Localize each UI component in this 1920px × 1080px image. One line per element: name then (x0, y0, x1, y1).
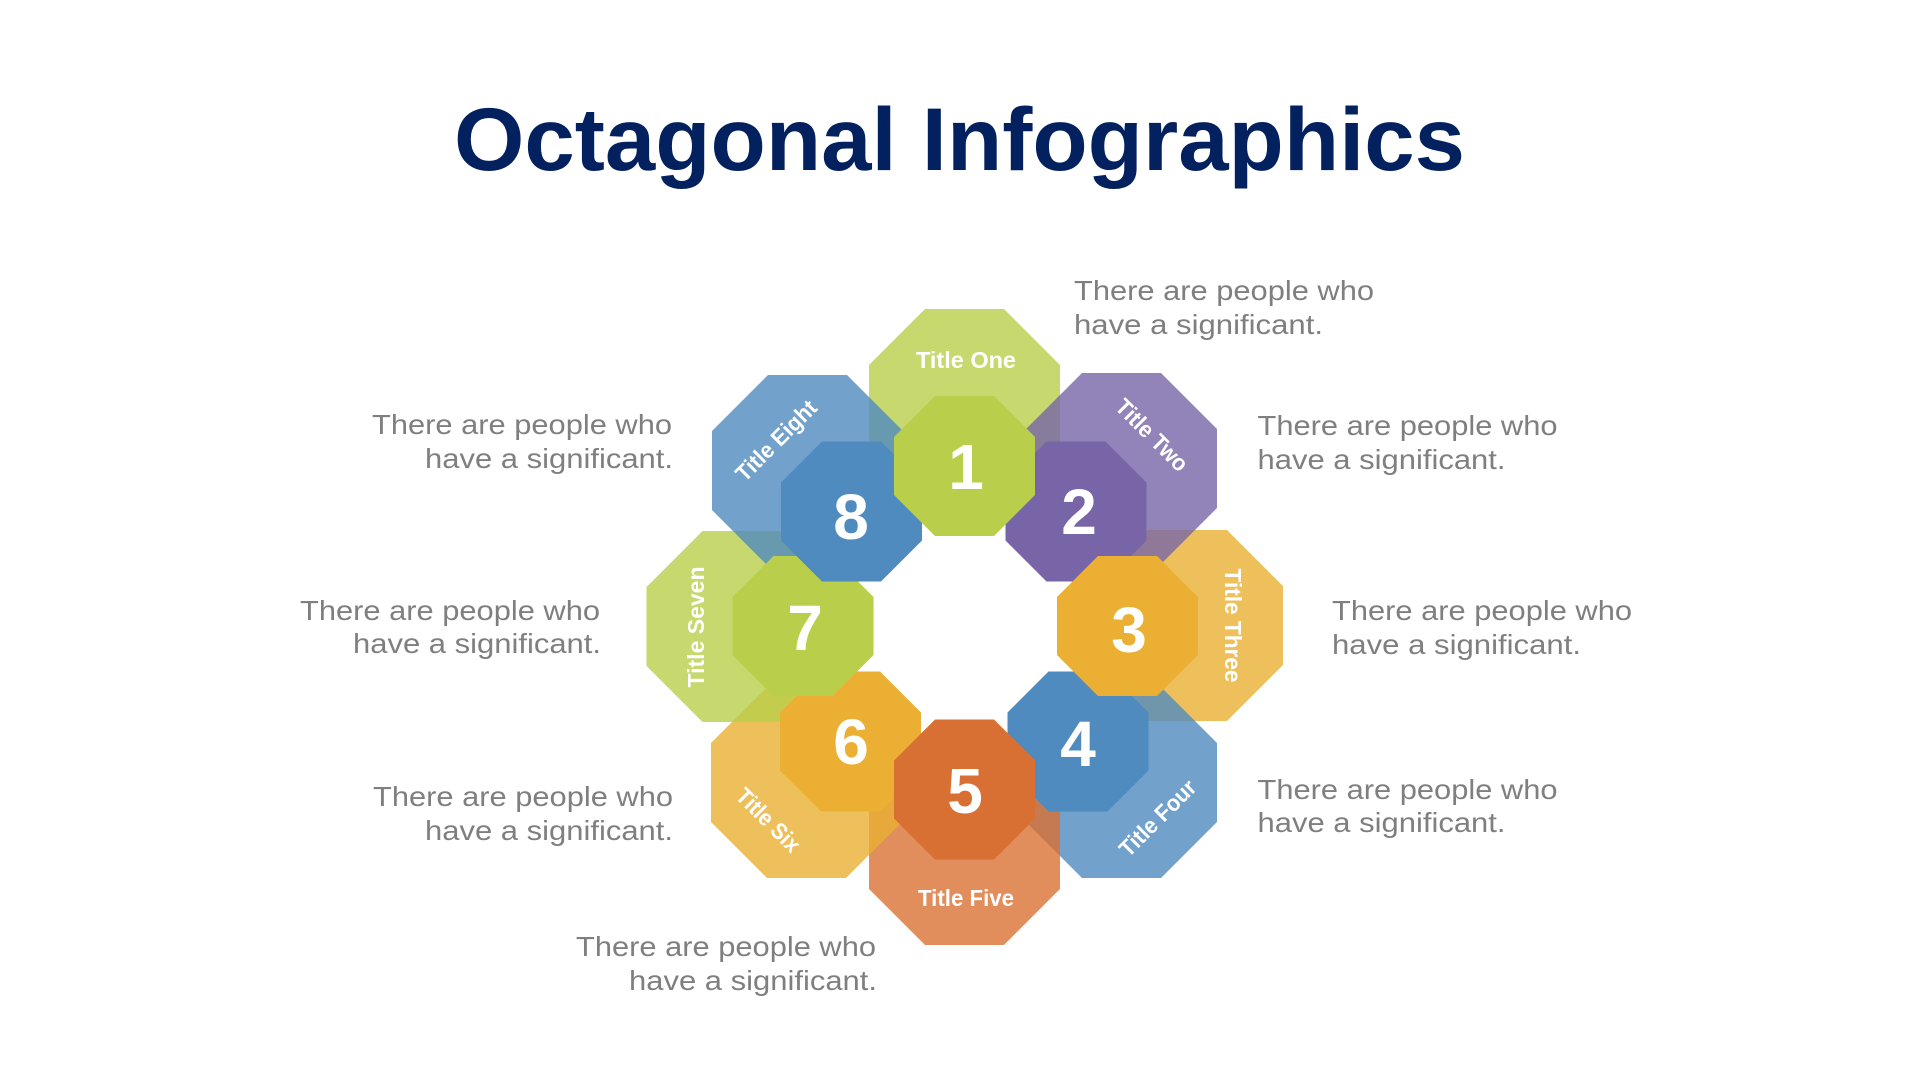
outer octagon 3 (1092, 530, 1283, 721)
text block 2 (1258, 410, 1558, 475)
inner octagon 8 (781, 442, 922, 582)
label: Title Two: Title Two (1110, 393, 1194, 477)
text block 8: There are people who (372, 409, 672, 440)
text block 5 (576, 931, 877, 996)
text block 5: There are people who (576, 931, 876, 962)
text block 1 (1074, 275, 1374, 340)
inner octagon 1 (894, 396, 1035, 536)
inner octagon 3 (1057, 556, 1198, 696)
text block 8 (372, 409, 673, 474)
number 1: 1 (948, 431, 984, 503)
text block 4: have a significant. (1258, 807, 1506, 838)
label: Title Six: Title Six (731, 783, 806, 858)
outer octagon 8 (712, 375, 903, 566)
text block 4: There are people who (1258, 774, 1558, 805)
number 6: 6 (833, 706, 869, 778)
text block 6: There are people who (373, 781, 673, 812)
number 4: 4 (1060, 708, 1096, 780)
text block 8: have a significant. (425, 443, 673, 474)
inner octagon 5 (894, 720, 1035, 860)
number 3: 3 (1111, 594, 1147, 666)
octagon ring diagram (646, 309, 1283, 945)
outer octagon 4 (1026, 687, 1217, 878)
text block 3 (1332, 595, 1632, 660)
outer octagon 6 (711, 687, 902, 878)
text block 2: There are people who (1258, 410, 1558, 441)
label: Title Eight: Title Eight (730, 394, 822, 486)
inner octagon 6 (780, 672, 921, 812)
text block 7 (300, 595, 601, 659)
text block 5: have a significant. (629, 965, 877, 996)
label: Title Seven: Title Seven (683, 566, 709, 688)
text block 3: have a significant. (1332, 629, 1581, 660)
text block 4 (1258, 774, 1558, 838)
outer octagon 2 (1026, 373, 1217, 564)
label: Title One: Title One (916, 347, 1016, 373)
label: Title Five: Title Five (918, 885, 1014, 911)
outer octagon 7 (646, 531, 838, 722)
text block 3: There are people who (1332, 595, 1632, 626)
label: Title Four: Title Four (1114, 774, 1201, 862)
number 2: 2 (1061, 476, 1097, 548)
text block 7: have a significant. (353, 628, 601, 659)
text block 1: There are people who (1074, 275, 1374, 306)
text block 6 (373, 781, 673, 846)
text block 2: have a significant. (1258, 444, 1506, 475)
inner octagon 7 (732, 556, 874, 696)
inner octagon 4 (1008, 672, 1148, 812)
outer octagon 1 (869, 309, 1060, 500)
title: Octagonal Infographics (454, 89, 1465, 189)
text block 1: have a significant. (1074, 309, 1323, 340)
number 5: 5 (947, 755, 983, 827)
label: Title Three: Title Three (1220, 568, 1246, 682)
text block 7: There are people who (300, 595, 600, 626)
number 8: 8 (833, 481, 869, 553)
inner octagon 2 (1006, 442, 1146, 582)
text block 6: have a significant. (425, 815, 673, 846)
number 7: 7 (787, 592, 823, 664)
outer octagon 5 (869, 754, 1060, 945)
